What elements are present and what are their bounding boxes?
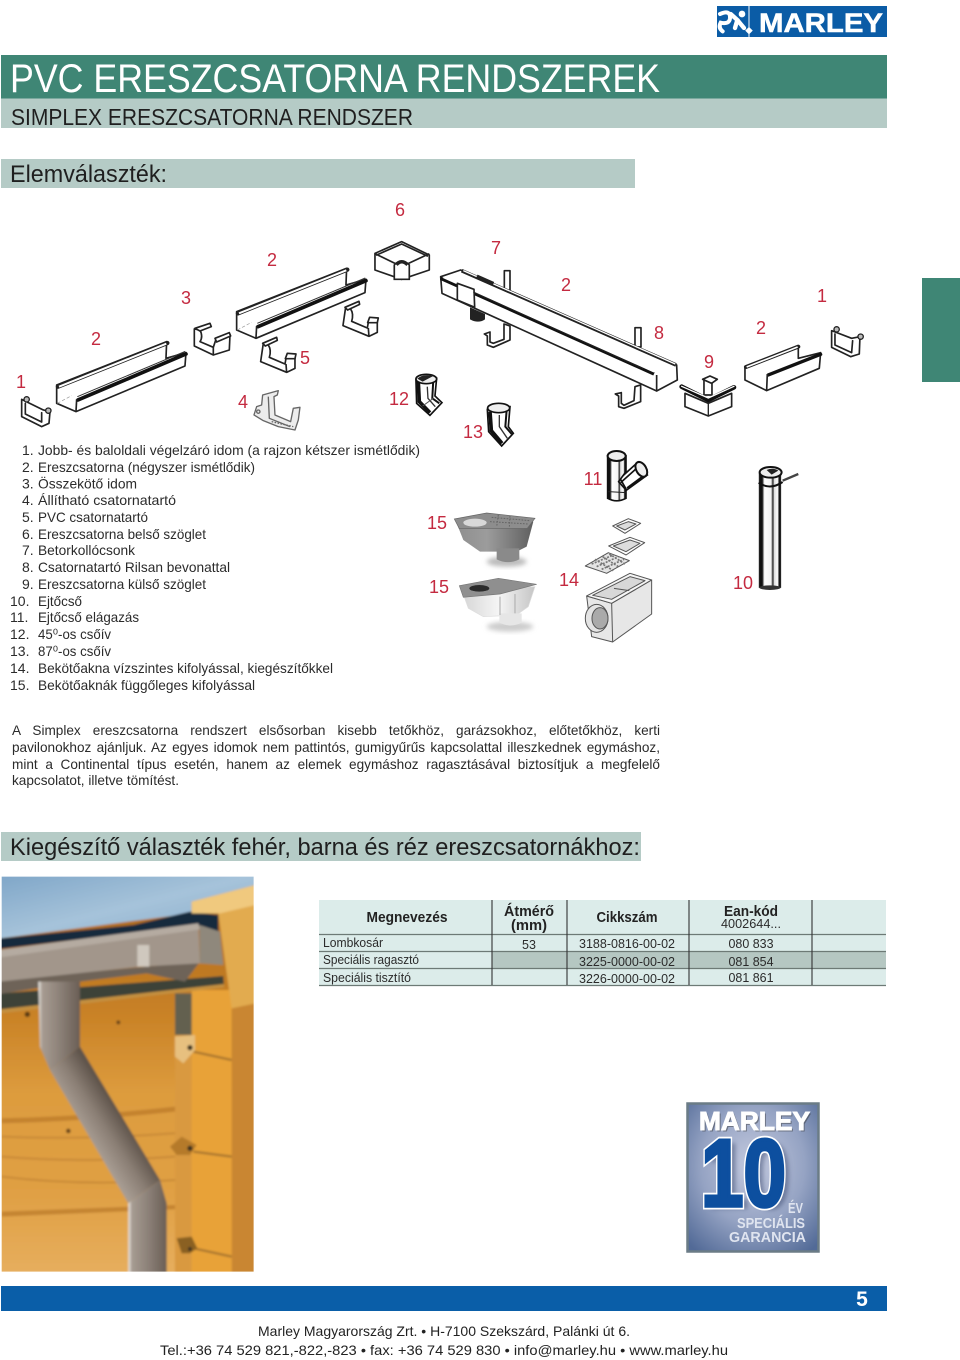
- side tab: [922, 278, 960, 382]
- part numbers: 14: [559, 570, 579, 590]
- parts list: 3.: [22, 476, 34, 492]
- part numbers: 7: [491, 238, 501, 258]
- parts list: Ereszcsatorna (négyszer ismétlődik): [38, 459, 255, 475]
- part numbers: 13: [463, 422, 483, 442]
- icon: gully 15 grey: [454, 513, 535, 567]
- table rows: 3226-0000-00-02: [579, 972, 675, 986]
- badge: 10 year guarantee: 10: [701, 1120, 786, 1227]
- parts list: 5.: [22, 509, 34, 525]
- parts list: 10.: [10, 593, 29, 609]
- table rows: [323, 936, 774, 986]
- section heading: Kiegészítő választék: Kiegészítő választék fehér, barna és réz ereszcsatornákhoz:: [10, 834, 640, 861]
- wood grain: [2, 1012, 175, 1217]
- parts list: 45⁰-os csőív: [38, 626, 111, 642]
- table rows: 080 833: [728, 937, 774, 951]
- badge: 10 year guarantee: 10: [707, 1123, 792, 1230]
- icon: downpipe 10: [759, 467, 798, 590]
- part numbers: 12: [389, 389, 409, 409]
- icon: long gutter 7: [441, 270, 677, 408]
- table header: Megnevezés: [366, 910, 448, 926]
- icon: end cap 1 right: [832, 327, 863, 357]
- icon: end cap 1: [22, 397, 51, 427]
- parts list: 8.: [22, 559, 34, 575]
- part numbers: 4: [238, 392, 248, 412]
- photo: gutter on log house: [0, 875, 255, 1273]
- description paragraph: kapcsolatot, illetve tömítést.: [12, 773, 179, 788]
- icon: elbow 12: [416, 374, 442, 415]
- part numbers: 10: [733, 573, 753, 593]
- table: [319, 900, 886, 986]
- logo: Marley: MARLEY: [759, 8, 883, 38]
- parts list: Csatornatartó Rilsan bevonattal: [38, 559, 230, 575]
- parts list: 13.: [10, 643, 29, 659]
- footer contact: [160, 1323, 728, 1358]
- table header: 4002644...: [721, 917, 781, 931]
- downpipe: [38, 982, 80, 1070]
- description paragraph: mint a Continental típus esetén, hanem az elemek egymáshoz ragasztásával biztosítjuk a megfelelő: [12, 757, 660, 772]
- table header: [366, 903, 781, 934]
- badge: 10 year guarantee: [688, 1104, 818, 1252]
- part numbers: 8: [654, 323, 664, 343]
- parts list: 87⁰-os csőív: [38, 643, 111, 659]
- parts list: Állítható csatornatartó: [38, 492, 176, 508]
- table rows: 3188-0816-00-02: [579, 937, 675, 951]
- section heading: Elemválaszték: [1, 159, 635, 188]
- description paragraph: [12, 723, 660, 788]
- icon: adjustable bracket 4: [254, 391, 300, 430]
- icon: bracket 5: [261, 337, 296, 372]
- soffit: [0, 976, 224, 1010]
- parts list: 6.: [22, 526, 34, 542]
- table rows: Speciális ragasztó: [323, 953, 419, 967]
- part numbers: 1: [16, 372, 26, 392]
- icon: short gutter 2: [745, 346, 821, 391]
- icon: connector 3: [194, 323, 231, 355]
- table header: Átmérő: [504, 903, 554, 920]
- section heading: Elemválaszték: Elemválaszték:: [10, 161, 167, 188]
- diagram: lower parts: [454, 451, 798, 642]
- icon: gully 15 white: [459, 578, 537, 632]
- table header: Ean-kód: [724, 904, 778, 920]
- icon: gully 14 exploded: [585, 519, 652, 642]
- parts list: 4.: [22, 492, 34, 508]
- badge: 10 year guarantee: 10: [701, 1120, 786, 1227]
- parts list: 2.: [22, 459, 34, 475]
- table rows: 081 854: [728, 955, 774, 969]
- table header: (mm): [511, 918, 547, 934]
- icon: gutter 2 left: [57, 342, 186, 412]
- parts list: Bekötőaknák függőleges kifolyással: [38, 677, 255, 693]
- parts list: PVC csatornatartó: [38, 509, 148, 525]
- part numbers: [16, 200, 827, 597]
- table rows: Lombkosár: [323, 936, 383, 950]
- logo: Marley: [717, 6, 887, 38]
- part numbers: 2: [756, 318, 766, 338]
- badge: 10 year guarantee: MARLEY: [699, 1106, 810, 1136]
- badge: 10 year guarantee: MARLEY: [700, 1108, 812, 1138]
- diagram: upper left gutter parts: [22, 242, 442, 430]
- roof sheet: [0, 875, 255, 938]
- description paragraph: A Simplex ereszcsatorna rendszert elsősorban kisebb tetőkhöz, garázsokhoz, előtetőkhöz, kerti: [12, 723, 660, 738]
- diagram: long gutter and right parts: [441, 270, 863, 446]
- table header: Cikkszám: [596, 910, 658, 926]
- table rows: 081 861: [728, 971, 774, 985]
- badge: 10 year guarantee: GARANCIA: [729, 1229, 806, 1246]
- parts list: Ejtőcső elágazás: [38, 609, 139, 625]
- log ends: [170, 990, 255, 1273]
- parts list: Bekötőakna vízszintes kifolyással, kiegészítőkkel: [38, 660, 333, 676]
- parts list: Ereszcsatorna belső szöglet: [38, 526, 206, 542]
- parts list: 11.: [10, 609, 28, 625]
- gutter: [0, 962, 200, 994]
- table rows: Speciális tisztító: [323, 971, 411, 985]
- part numbers: 5: [300, 348, 310, 368]
- part numbers: 15: [429, 577, 449, 597]
- parts list: 1.: [22, 442, 34, 458]
- parts list: 14.: [10, 660, 29, 676]
- footer contact: Marley Magyarország Zrt. • H-7100 Szekszárd, Palánki út 6.: [258, 1323, 630, 1339]
- table rows: 3225-0000-00-02: [579, 955, 675, 969]
- part numbers: 2: [267, 250, 277, 270]
- icon: elbow 13: [487, 403, 513, 446]
- table rows: 53: [522, 938, 536, 952]
- parts list: 9.: [22, 576, 34, 592]
- icon: second bracket 5: [343, 301, 378, 336]
- parts list: Betorkollócsonk: [38, 542, 136, 558]
- part numbers: 15: [427, 513, 447, 533]
- table backgrounds: [319, 900, 886, 986]
- parts list: 7.: [22, 542, 34, 558]
- footer bar with page number: [1, 1286, 887, 1311]
- parts list: Összekötő idom: [38, 474, 137, 492]
- description paragraph: pavilonokhoz ajánljuk. Az egyes idomok nem pattintós, gumigyűrűs kapcsolattal illeszkednek egymáshoz,: [12, 740, 660, 755]
- icon: branch 11: [608, 451, 650, 501]
- subtitle banner: SIMPLEX ERESZCSATORNA RENDSZER: [11, 104, 413, 130]
- parts list: Jobb- és baloldali végelzáró idom (a rajzon kétszer ismétlődik): [38, 442, 420, 458]
- icon: inner corner 6: [375, 242, 429, 279]
- title banner: PVC ERESZCSATORNA RENDSZEREK: [10, 57, 660, 101]
- icon: gutter 2 middle: [237, 268, 366, 338]
- footer contact: Tel.:+36 74 529 821,-822,-823 • fax: +36 74 529 830 • info@marley.hu • www.marley.hu: [160, 1342, 728, 1358]
- parts list: Ejtőcső: [38, 593, 82, 609]
- parts list: [10, 442, 420, 693]
- subtitle banner: [1, 98, 887, 130]
- part numbers: 6: [395, 200, 405, 220]
- gable board: [218, 903, 255, 1008]
- badge: 10 year guarantee: SPECIÁLIS: [737, 1215, 805, 1232]
- parts list: Ereszcsatorna külső szöglet: [38, 576, 206, 592]
- footer bar with page number: 5: [856, 1288, 868, 1311]
- part numbers: 2: [561, 275, 571, 295]
- part numbers: 11: [584, 469, 602, 489]
- parts list: 15.: [10, 677, 29, 693]
- part numbers: 9: [704, 352, 714, 372]
- icon: outer corner 9: [682, 376, 734, 416]
- parts list: 12.: [10, 626, 29, 642]
- badge: 10 year guarantee: ÉV: [788, 1200, 803, 1217]
- part numbers: 2: [91, 329, 101, 349]
- part numbers: 1: [817, 286, 827, 306]
- part numbers: 3: [181, 288, 191, 308]
